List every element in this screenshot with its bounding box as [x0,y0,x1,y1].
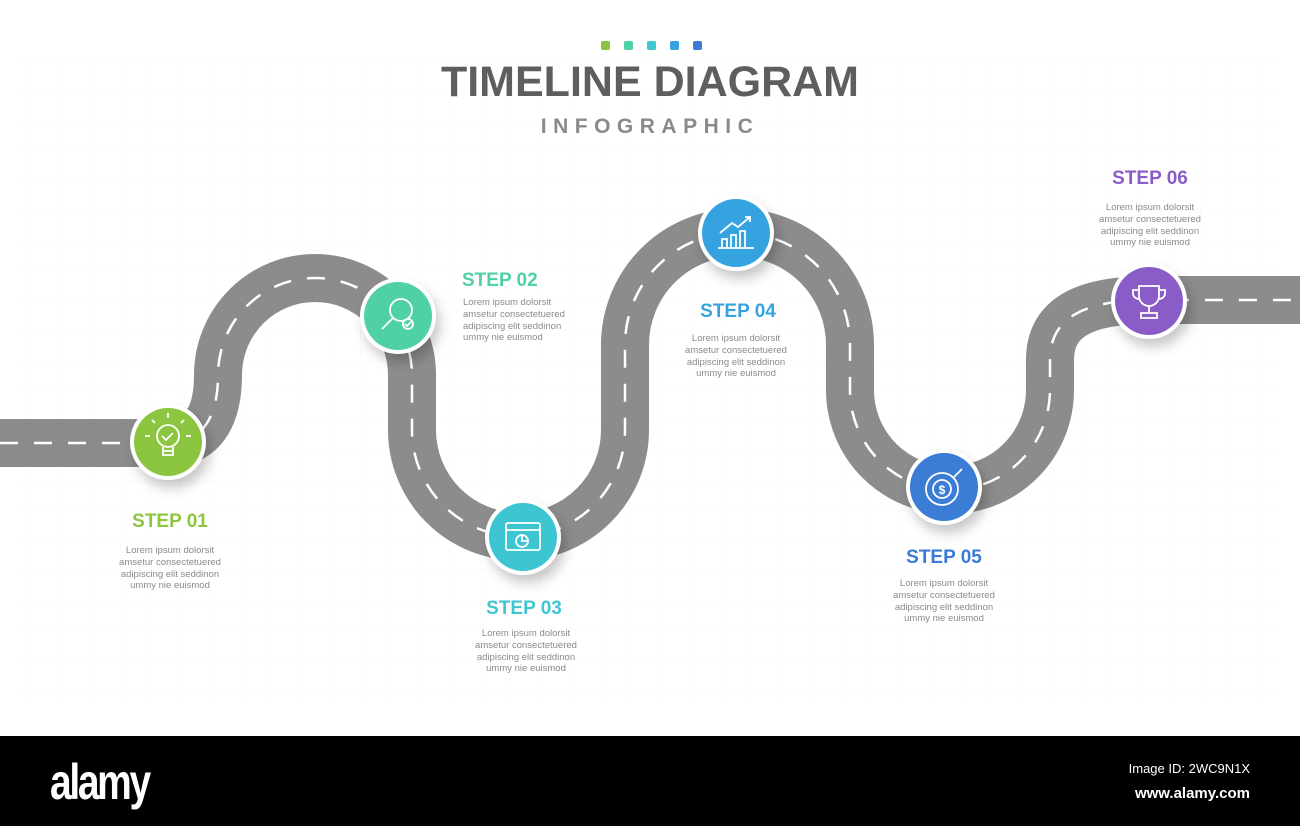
step 04 text: STEP 04 [700,301,776,322]
step 04 text [685,301,787,379]
icon: browser chart [506,523,540,550]
step 02 text: adipiscing elit seddinon [463,321,561,332]
step 02 text: Lorem ipsum dolorsit [463,297,552,308]
icon: dollar target: $ [939,483,946,497]
step 02 text [462,270,565,343]
step 06 text: Lorem ipsum dolorsit [1106,202,1194,213]
step 06 text: amsetur consectetuered [1099,214,1201,225]
step 01 text: ummy nie euismod [130,580,210,591]
icon: lightbulb [145,413,191,455]
step 04 text: Lorem ipsum dolorsit [692,333,780,344]
title: TIMELINE DIAGRAM [441,58,859,106]
step 02 text: ummy nie euismod [463,332,543,343]
road [0,233,1300,537]
step 03 text: ummy nie euismod [486,663,566,674]
step 05 text: STEP 05 [906,547,982,568]
step 03 text: STEP 03 [486,598,562,619]
step 01 text: adipiscing elit seddinon [121,569,219,580]
footer bar [0,736,1300,826]
step 01 text: STEP 01 [132,511,208,532]
footer bar: www.alamy.com [1134,785,1250,802]
step 03 marker [485,499,561,575]
step 06 text: ummy nie euismod [1110,237,1190,248]
step 04 text: ummy nie euismod [696,368,776,379]
step 05 text: Lorem ipsum dolorsit [900,578,988,589]
step 03 text [475,598,577,674]
title [441,41,859,138]
step 03 text: amsetur consectetuered [475,640,577,651]
step 05 text: adipiscing elit seddinon [895,602,993,613]
step 03 text: Lorem ipsum dolorsit [482,628,570,639]
icon: magnifier [382,299,413,329]
footer bar: Image ID: 2WC9N1X [1129,761,1250,776]
step 02 marker [360,278,436,354]
step 04 marker [698,195,774,271]
step 06 text [1099,168,1201,248]
icon: growth chart [718,217,754,248]
step 04 text: adipiscing elit seddinon [687,357,785,368]
step 05 text: ummy nie euismod [904,613,984,624]
step 05 text [893,547,995,624]
step 01 text [119,511,221,591]
step 03 text: adipiscing elit seddinon [477,652,575,663]
step 02 text: amsetur consectetuered [463,309,565,320]
step 06 text: adipiscing elit seddinon [1101,226,1199,237]
step 06 text: STEP 06 [1112,168,1188,189]
step 01 text: Lorem ipsum dolorsit [126,545,214,556]
step 04 text: amsetur consectetuered [685,345,787,356]
step 02 text: STEP 02 [462,270,538,291]
icon: trophy [1133,286,1165,318]
footer bar: alamy [50,753,151,810]
title: INFOGRAPHIC [541,115,759,138]
step 01 marker [130,404,206,480]
step 01 text: amsetur consectetuered [119,557,221,568]
step 06 marker [1111,263,1187,339]
step 05 marker [906,449,982,525]
step 05 text: amsetur consectetuered [893,590,995,601]
color dots [601,41,702,50]
